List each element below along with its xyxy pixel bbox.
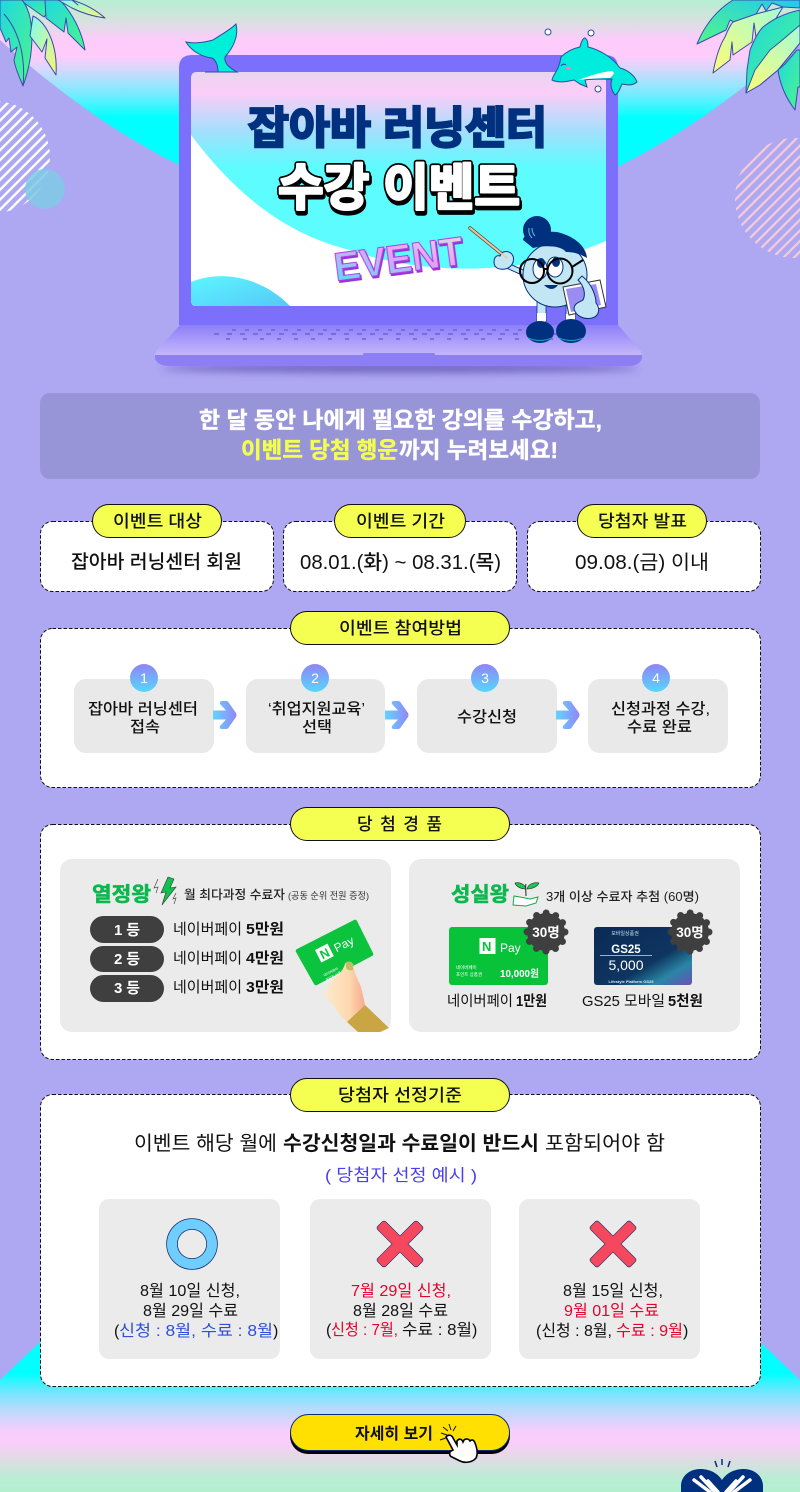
icon: pointing hand bbox=[446, 1435, 477, 1462]
rank 1: 네이버페이 bbox=[173, 921, 242, 938]
panel: event target: 잡아바 러닝센터 회원 bbox=[71, 551, 242, 573]
Npay gift card: Pay bbox=[500, 941, 521, 955]
panel: event period: 이벤트 기간 bbox=[356, 512, 445, 531]
criteria sentence: 수강신청일과 수료일이 반드시 bbox=[283, 1132, 539, 1155]
holding hand bbox=[574, 276, 599, 319]
step 4: 수료 완료 bbox=[627, 718, 692, 736]
badge: 30 winners Npay bbox=[527, 913, 565, 951]
laptop shadow bbox=[162, 363, 638, 373]
logo: navy heart with hands bbox=[681, 1459, 763, 1492]
step 4 bbox=[588, 664, 728, 753]
example card 3: 8월 15일 신청, bbox=[563, 1282, 663, 1300]
icon: red X bbox=[590, 1221, 636, 1267]
icon: click sparks bbox=[440, 1424, 456, 1440]
title line 2: 수강 이벤트 bbox=[278, 160, 520, 216]
banner line 2: 이벤트 당첨 행운 bbox=[241, 438, 398, 463]
icon: red X bbox=[377, 1221, 423, 1267]
book bbox=[563, 280, 606, 315]
panel: winner announcement bbox=[528, 504, 760, 592]
prize card: passion king: (공동 순위 전원 증정) bbox=[288, 890, 369, 902]
arrow 2 bbox=[385, 701, 408, 729]
bubbles near dolphin bbox=[545, 29, 601, 92]
icon: dolphin bbox=[552, 38, 637, 95]
example card 3: 9월 01일 수료 bbox=[564, 1302, 659, 1320]
rank 2 bbox=[90, 946, 284, 972]
laptop screen bbox=[191, 72, 606, 306]
label: Npay 10k: 네이버페이 bbox=[447, 993, 513, 1010]
head bbox=[523, 243, 587, 307]
prize card: passion king bbox=[60, 859, 391, 1032]
GS25 gift card: GS25 bbox=[611, 944, 641, 956]
trackpad notch bbox=[363, 353, 435, 357]
laptop lid bbox=[179, 55, 618, 325]
eyes bbox=[533, 259, 547, 279]
example card 3: (신청 : 8월, bbox=[536, 1322, 612, 1340]
icon: palm leaves top left bbox=[0, 0, 105, 86]
illustration: hand holding Npay card: N bbox=[318, 946, 332, 962]
panel: winner selection criteria: 당첨자 선정기준 bbox=[338, 1086, 462, 1105]
illustration: hand holding Npay card bbox=[296, 920, 389, 1032]
icon: palm leaves top right bbox=[697, 0, 800, 110]
prize card: sincerity king: 3개 이상 수료자 추첨 (60명) bbox=[546, 890, 699, 904]
rank 2: 2 등 bbox=[114, 951, 140, 968]
step 1: 잡아바 러닝센터 bbox=[88, 700, 198, 718]
character: teacher with glasses bbox=[470, 216, 606, 343]
raised arm bbox=[508, 266, 526, 274]
decorative striped circle left bbox=[0, 101, 50, 213]
example card 2: 8월 28일 수료 bbox=[353, 1302, 448, 1320]
prize card: sincerity king bbox=[409, 859, 740, 1032]
criteria sentence: 포함되어야 함 bbox=[545, 1132, 665, 1155]
button: view details: 자세히 보기 bbox=[355, 1425, 433, 1443]
button: view details bbox=[290, 1414, 510, 1462]
example card 2: 신청 : 7월, bbox=[331, 1321, 398, 1339]
rank 1: 5만원 bbox=[246, 921, 284, 938]
example heading: ( 당첨자 선정 예시 ) bbox=[325, 1166, 477, 1185]
shoes bbox=[526, 321, 554, 343]
example card 1: 8월 10일 신청, bbox=[140, 1282, 240, 1300]
icon: whale tail bbox=[186, 24, 237, 72]
label: GS25 5k: 5천원 bbox=[668, 993, 703, 1010]
example card 3: 수료 : 9월 bbox=[616, 1322, 683, 1340]
icon: circle O bbox=[172, 1224, 212, 1264]
step 3: 수강신청 bbox=[457, 708, 517, 726]
screen blue blob bbox=[191, 276, 290, 306]
example card 2: 수료 : 8월 bbox=[402, 1321, 472, 1339]
rank 3: 3만원 bbox=[246, 979, 284, 996]
badge: 30 winners GS25 bbox=[671, 913, 709, 951]
panel: winner announcement: 당첨자 발표 bbox=[598, 512, 687, 531]
illustration: hand holding Npay card: Pay bbox=[331, 933, 356, 955]
rank 1 bbox=[90, 916, 284, 943]
step 1: 1 bbox=[140, 670, 148, 686]
laptop illustration bbox=[155, 55, 642, 373]
step 3: 3 bbox=[481, 670, 489, 686]
banner line 1: 한 달 동안 나에게 필요한 강의를 수강하고, bbox=[199, 408, 602, 433]
panel: event period: 08.01.(화) ~ 08.31.(목) bbox=[300, 552, 501, 574]
step 4: 4 bbox=[652, 670, 660, 686]
icon: lightning bolts bbox=[154, 877, 176, 905]
example card 1: ( bbox=[114, 1323, 120, 1340]
example card 3: ) bbox=[683, 1323, 688, 1340]
panel: winner announcement: 09.08.(금) 이내 bbox=[575, 551, 709, 574]
step 4: 신청과정 수강, bbox=[611, 700, 710, 718]
icon: sprout in hand bbox=[513, 883, 539, 906]
step 2: ‘취업지원교육’ bbox=[268, 700, 365, 718]
step 2: 선택 bbox=[302, 718, 332, 736]
decorative striped circle right bbox=[735, 138, 800, 258]
rank 1: 1 등 bbox=[114, 922, 140, 939]
GS25 gift card: Lifestyle Platform GS25 bbox=[609, 979, 654, 984]
label: GS25 5k: GS25 모바일 bbox=[582, 993, 665, 1010]
legs bbox=[537, 300, 546, 324]
panel: event period bbox=[284, 504, 516, 592]
arrow 1 bbox=[213, 701, 236, 729]
panel: prizes: 당 첨 경 품 bbox=[357, 815, 442, 834]
GS25 gift card bbox=[594, 927, 692, 985]
screen white swoosh bbox=[191, 135, 606, 306]
prize card: passion king: 열정왕 bbox=[92, 883, 151, 906]
title line 2: 수강 이벤트 bbox=[278, 160, 520, 216]
Npay gift card: 포인트 상품권 bbox=[456, 971, 482, 977]
banner line 2: 까지 누려보세요! bbox=[399, 438, 558, 463]
label: Npay 10k: 1만원 bbox=[516, 993, 547, 1010]
Npay gift card: 10,000원 bbox=[500, 967, 539, 980]
panel: prizes bbox=[40, 808, 760, 1060]
example card 1: 신청 : 8월, 수료 : 8월 bbox=[119, 1322, 273, 1340]
step 1 bbox=[74, 664, 214, 753]
example card 1: ) bbox=[273, 1323, 278, 1340]
GS25 gift card: 모바일상품권 bbox=[611, 930, 639, 937]
title line 1: 잡아바 러닝센터 bbox=[248, 104, 547, 153]
EVENT label: EVENT bbox=[331, 229, 466, 290]
step 3 bbox=[417, 664, 557, 753]
panel: event target: 이벤트 대상 bbox=[113, 512, 202, 531]
example card 2 bbox=[310, 1199, 491, 1359]
panel: how to participate bbox=[40, 612, 760, 788]
rank 3: 네이버페이 bbox=[173, 979, 242, 996]
badge: 30 winners GS25: 30명 bbox=[676, 925, 704, 940]
prize card: passion king: 월 최다과정 수료자 bbox=[184, 887, 286, 902]
decorative blue circle left bbox=[25, 169, 65, 209]
illustration: hand holding Npay card: 네이버페이 bbox=[322, 966, 339, 978]
example card 2: ) bbox=[472, 1322, 477, 1339]
example card 1 bbox=[99, 1199, 280, 1359]
GS25 gift card: 5,000 bbox=[608, 957, 644, 973]
Npay gift card bbox=[449, 927, 548, 985]
example card 2: 7월 29일 신청, bbox=[351, 1282, 451, 1300]
rank 2: 4만원 bbox=[246, 950, 284, 967]
laptop front lip bbox=[155, 355, 642, 366]
rank 3: 3 등 bbox=[114, 980, 140, 997]
step 1: 접속 bbox=[130, 718, 160, 736]
intro banner bbox=[40, 393, 760, 479]
badge: 30 winners Npay: 30명 bbox=[532, 925, 560, 940]
keyboard keys bbox=[214, 330, 570, 339]
rank 3 bbox=[90, 975, 284, 1002]
arrow 3 bbox=[556, 701, 580, 729]
example card 1: 8월 29일 수료 bbox=[143, 1302, 238, 1320]
rank 2: 네이버페이 bbox=[173, 950, 242, 967]
example card 2: ( bbox=[326, 1322, 332, 1339]
panel: winner selection criteria bbox=[40, 1078, 760, 1386]
criteria sentence: 이벤트 해당 월에 bbox=[134, 1132, 277, 1155]
step 2: 2 bbox=[311, 670, 319, 686]
panel: event target bbox=[40, 504, 274, 592]
panel: how to participate: 이벤트 참여방법 bbox=[339, 619, 462, 638]
mouth bbox=[544, 285, 558, 289]
pointer bbox=[470, 228, 508, 259]
Npay gift card: 네이버페이 bbox=[456, 964, 477, 971]
laptop base bbox=[155, 325, 642, 358]
step 2 bbox=[246, 664, 385, 753]
prize card: sincerity king: 성실왕 bbox=[451, 883, 509, 906]
illustration: hand holding Npay card: 포인트 상품권 bbox=[325, 968, 345, 982]
Npay gift card: N bbox=[482, 939, 491, 954]
example card 3 bbox=[519, 1199, 700, 1359]
hair bbox=[523, 216, 551, 244]
glasses bbox=[520, 259, 544, 283]
